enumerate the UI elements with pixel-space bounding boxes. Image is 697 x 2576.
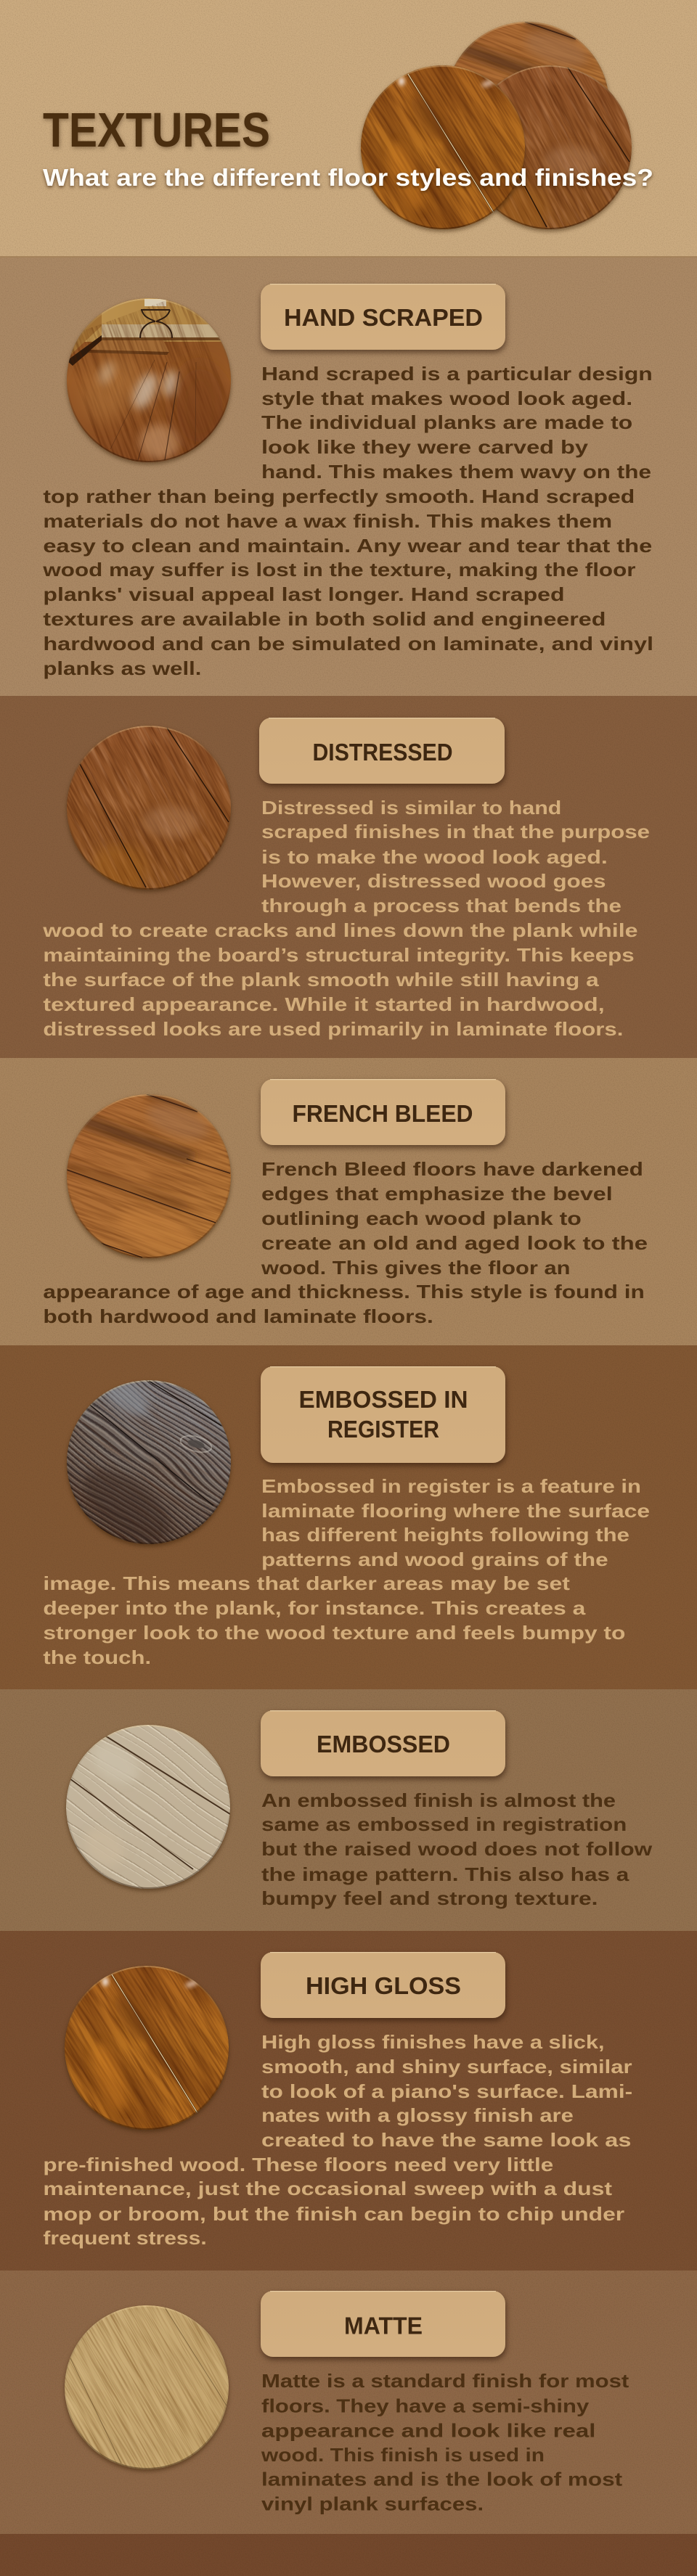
- text block: high gloss description: smooth, and shiny surface, similar: [261, 2056, 632, 2077]
- text block: embossed in register description: [43, 1475, 650, 1668]
- heading button: embossed: [261, 1710, 505, 1776]
- text block: hand scraped description: Hand scraped is a particular design: [261, 363, 653, 385]
- icon: distressed wood sample: [0, 641, 316, 975]
- text block: embossed description: same as embossed in registration: [261, 1813, 627, 1835]
- text block: distressed description: scraped finishes in that the purpose: [261, 821, 650, 842]
- text block: embossed in register description: image. This means that darker areas may be set: [43, 1572, 570, 1594]
- text block: high gloss description: nates with a glossy finish are: [261, 2104, 574, 2126]
- text block: french bleed description: create an old and aged look to the: [261, 1232, 648, 1254]
- heading button: matte: MATTE: [344, 2312, 423, 2339]
- icon: high gloss wood sample: [0, 1878, 317, 2218]
- text block: hand scraped description: hardwood and can be simulated on laminate, and vinyl: [43, 633, 653, 655]
- icon: french bleed wood sample: [0, 1018, 307, 1334]
- icon: hand scraped floor photo: [65, 298, 233, 467]
- text block: embossed description: the image pattern. This also has a: [261, 1863, 629, 1885]
- text block: high gloss description: maintenance, just the occasional sweep with a dust: [43, 2178, 613, 2199]
- icon: three overlapping wood samples: [273, 0, 697, 317]
- heading button: distressed: [259, 718, 505, 784]
- text block: distressed description: [42, 797, 650, 1040]
- text block: distressed description: wood to create cracks and lines down the plank while: [42, 919, 638, 941]
- text block: french bleed description: appearance of age and thickness. This style is found in: [43, 1281, 645, 1303]
- text block: matte description: [261, 2370, 629, 2515]
- text block: hand scraped description: easy to clean and maintain. Any wear and tear that the: [43, 535, 652, 557]
- heading button: high gloss: [261, 1952, 505, 2018]
- heading button: embossed in register: [261, 1366, 505, 1463]
- text block: distressed description: textured appearance. While it started in hardwood,: [43, 993, 605, 1015]
- heading button: distressed: DISTRESSED: [312, 739, 453, 766]
- panel: matte: [0, 2271, 697, 2534]
- heading button: hand scraped: [261, 284, 505, 350]
- text block: high gloss description: to look of a piano's surface. Lami-: [261, 2080, 632, 2102]
- text block: embossed in register description: patterns and wood grains of the: [261, 1549, 608, 1570]
- text block: high gloss description: mop or broom, but the finish can begin to chip under: [43, 2203, 624, 2225]
- text block: hand scraped description: hand. This makes them wavy on the: [261, 461, 651, 483]
- text block: french bleed description: outlining each wood plank to: [261, 1207, 582, 1229]
- panel: embossed: [0, 1689, 697, 1931]
- text block: hand scraped description: planks as well.: [43, 657, 201, 679]
- text block: high gloss description: High gloss finishes have a slick,: [261, 2031, 605, 2053]
- text block: hand scraped description: planks' visual appeal last longer. Hand scraped: [43, 583, 565, 605]
- panel: high gloss: [0, 1878, 697, 2271]
- text block: hand scraped description: [42, 363, 653, 679]
- text block: distressed description: through a process that bends the: [261, 895, 621, 916]
- title: TEXTURES: [43, 103, 270, 157]
- heading button: embossed in register: EMBOSSED IN: [299, 1386, 468, 1413]
- text block: embossed description: but the raised wood does not follow: [261, 1838, 653, 1860]
- heading button: high gloss: HIGH GLOSS: [306, 1972, 461, 1999]
- text block: hand scraped description: materials do not have a wax finish. This makes them: [43, 510, 612, 532]
- text block: matte description: vinyl plank surfaces.: [261, 2493, 484, 2515]
- text block: embossed description: bumpy feel and strong texture.: [261, 1887, 598, 1909]
- text block: matte description: laminates and is the look of most: [261, 2469, 622, 2490]
- text block: high gloss description: frequent stress.: [43, 2227, 207, 2249]
- icon: embossed wood sample: [64, 1725, 232, 1893]
- heading button: french bleed: FRENCH BLEED: [292, 1100, 473, 1127]
- text block: distressed description: distressed looks are used primarily in laminate floors.: [43, 1018, 623, 1040]
- panel: header: [0, 0, 697, 317]
- text block: hand scraped description: look like they were carved by: [261, 436, 589, 458]
- text block: embossed in register description: the touch.: [43, 1646, 151, 1668]
- text block: embossed in register description: deeper into the plank, for instance. This creates a: [43, 1597, 586, 1619]
- text block: distressed description: However, distressed wood goes: [261, 870, 606, 892]
- text block: hand scraped description: textures are available in both solid and engineered: [43, 608, 606, 630]
- text block: embossed in register description: Embossed in register is a feature in: [261, 1475, 641, 1497]
- text block: matte description: Matte is a standard finish for most: [261, 2370, 629, 2392]
- text block: hand scraped description: top rather than being perfectly smooth. Hand scraped: [43, 485, 635, 507]
- text block: french bleed description: edges that emphasize the bevel: [261, 1183, 613, 1205]
- text block: hand scraped description: style that makes wood look aged.: [261, 387, 632, 409]
- text block: embossed in register description: has different heights following the: [261, 1524, 629, 1546]
- text block: hand scraped description: The individual planks are made to: [261, 411, 632, 433]
- text block: french bleed description: [43, 1158, 648, 1327]
- text block: high gloss description: [43, 2031, 632, 2249]
- heading button: french bleed: [261, 1079, 505, 1145]
- text block: matte description: wood. This finish is used in: [261, 2444, 545, 2466]
- text block: hand scraped description: wood may suffer is lost in the texture, making the floor: [42, 559, 636, 581]
- text block: embossed description: [261, 1789, 653, 1909]
- text block: high gloss description: pre-finished wood. These floors need very little: [43, 2154, 553, 2175]
- text block: embossed in register description: stronger look to the wood texture and feels bumpy to: [43, 1622, 625, 1644]
- text block: matte description: appearance and look like real: [261, 2420, 595, 2442]
- text block: french bleed description: French Bleed floors have darkened: [261, 1158, 643, 1180]
- subtitle: What are the different floor styles and finishes?: [43, 164, 653, 191]
- icon: matte wood sample: [62, 2305, 231, 2473]
- text block: french bleed description: both hardwood and laminate floors.: [43, 1305, 433, 1327]
- panel: hand scraped: [0, 258, 697, 696]
- icon: embossed in register wood sample: [65, 1380, 232, 1549]
- text block: matte description: floors. They have a semi-shiny: [261, 2395, 590, 2417]
- heading button: embossed: EMBOSSED: [317, 1731, 450, 1757]
- heading button: embossed in register: REGISTER: [327, 1416, 439, 1443]
- text block: french bleed description: wood. This gives the floor an: [261, 1257, 571, 1279]
- panel: distressed: [0, 641, 697, 1058]
- panel: embossed in register: [0, 1345, 697, 1689]
- panel: french bleed: [0, 1018, 697, 1345]
- text block: distressed description: is to make the wood look aged.: [261, 846, 608, 868]
- text block: distressed description: maintaining the board’s structural integrity. This keeps: [43, 944, 635, 966]
- text block: embossed in register description: laminate flooring where the surface: [261, 1500, 650, 1522]
- text block: high gloss description: created to have the same look as: [261, 2129, 631, 2151]
- heading button: matte: [261, 2291, 505, 2357]
- text block: distressed description: the surface of the plank smooth while still having a: [43, 969, 599, 990]
- text block: embossed description: An embossed finish is almost the: [261, 1789, 616, 1811]
- heading button: hand scraped: HAND SCRAPED: [284, 304, 483, 331]
- panel: footer band: [0, 2534, 697, 2576]
- text block: distressed description: Distressed is similar to hand: [261, 797, 561, 819]
